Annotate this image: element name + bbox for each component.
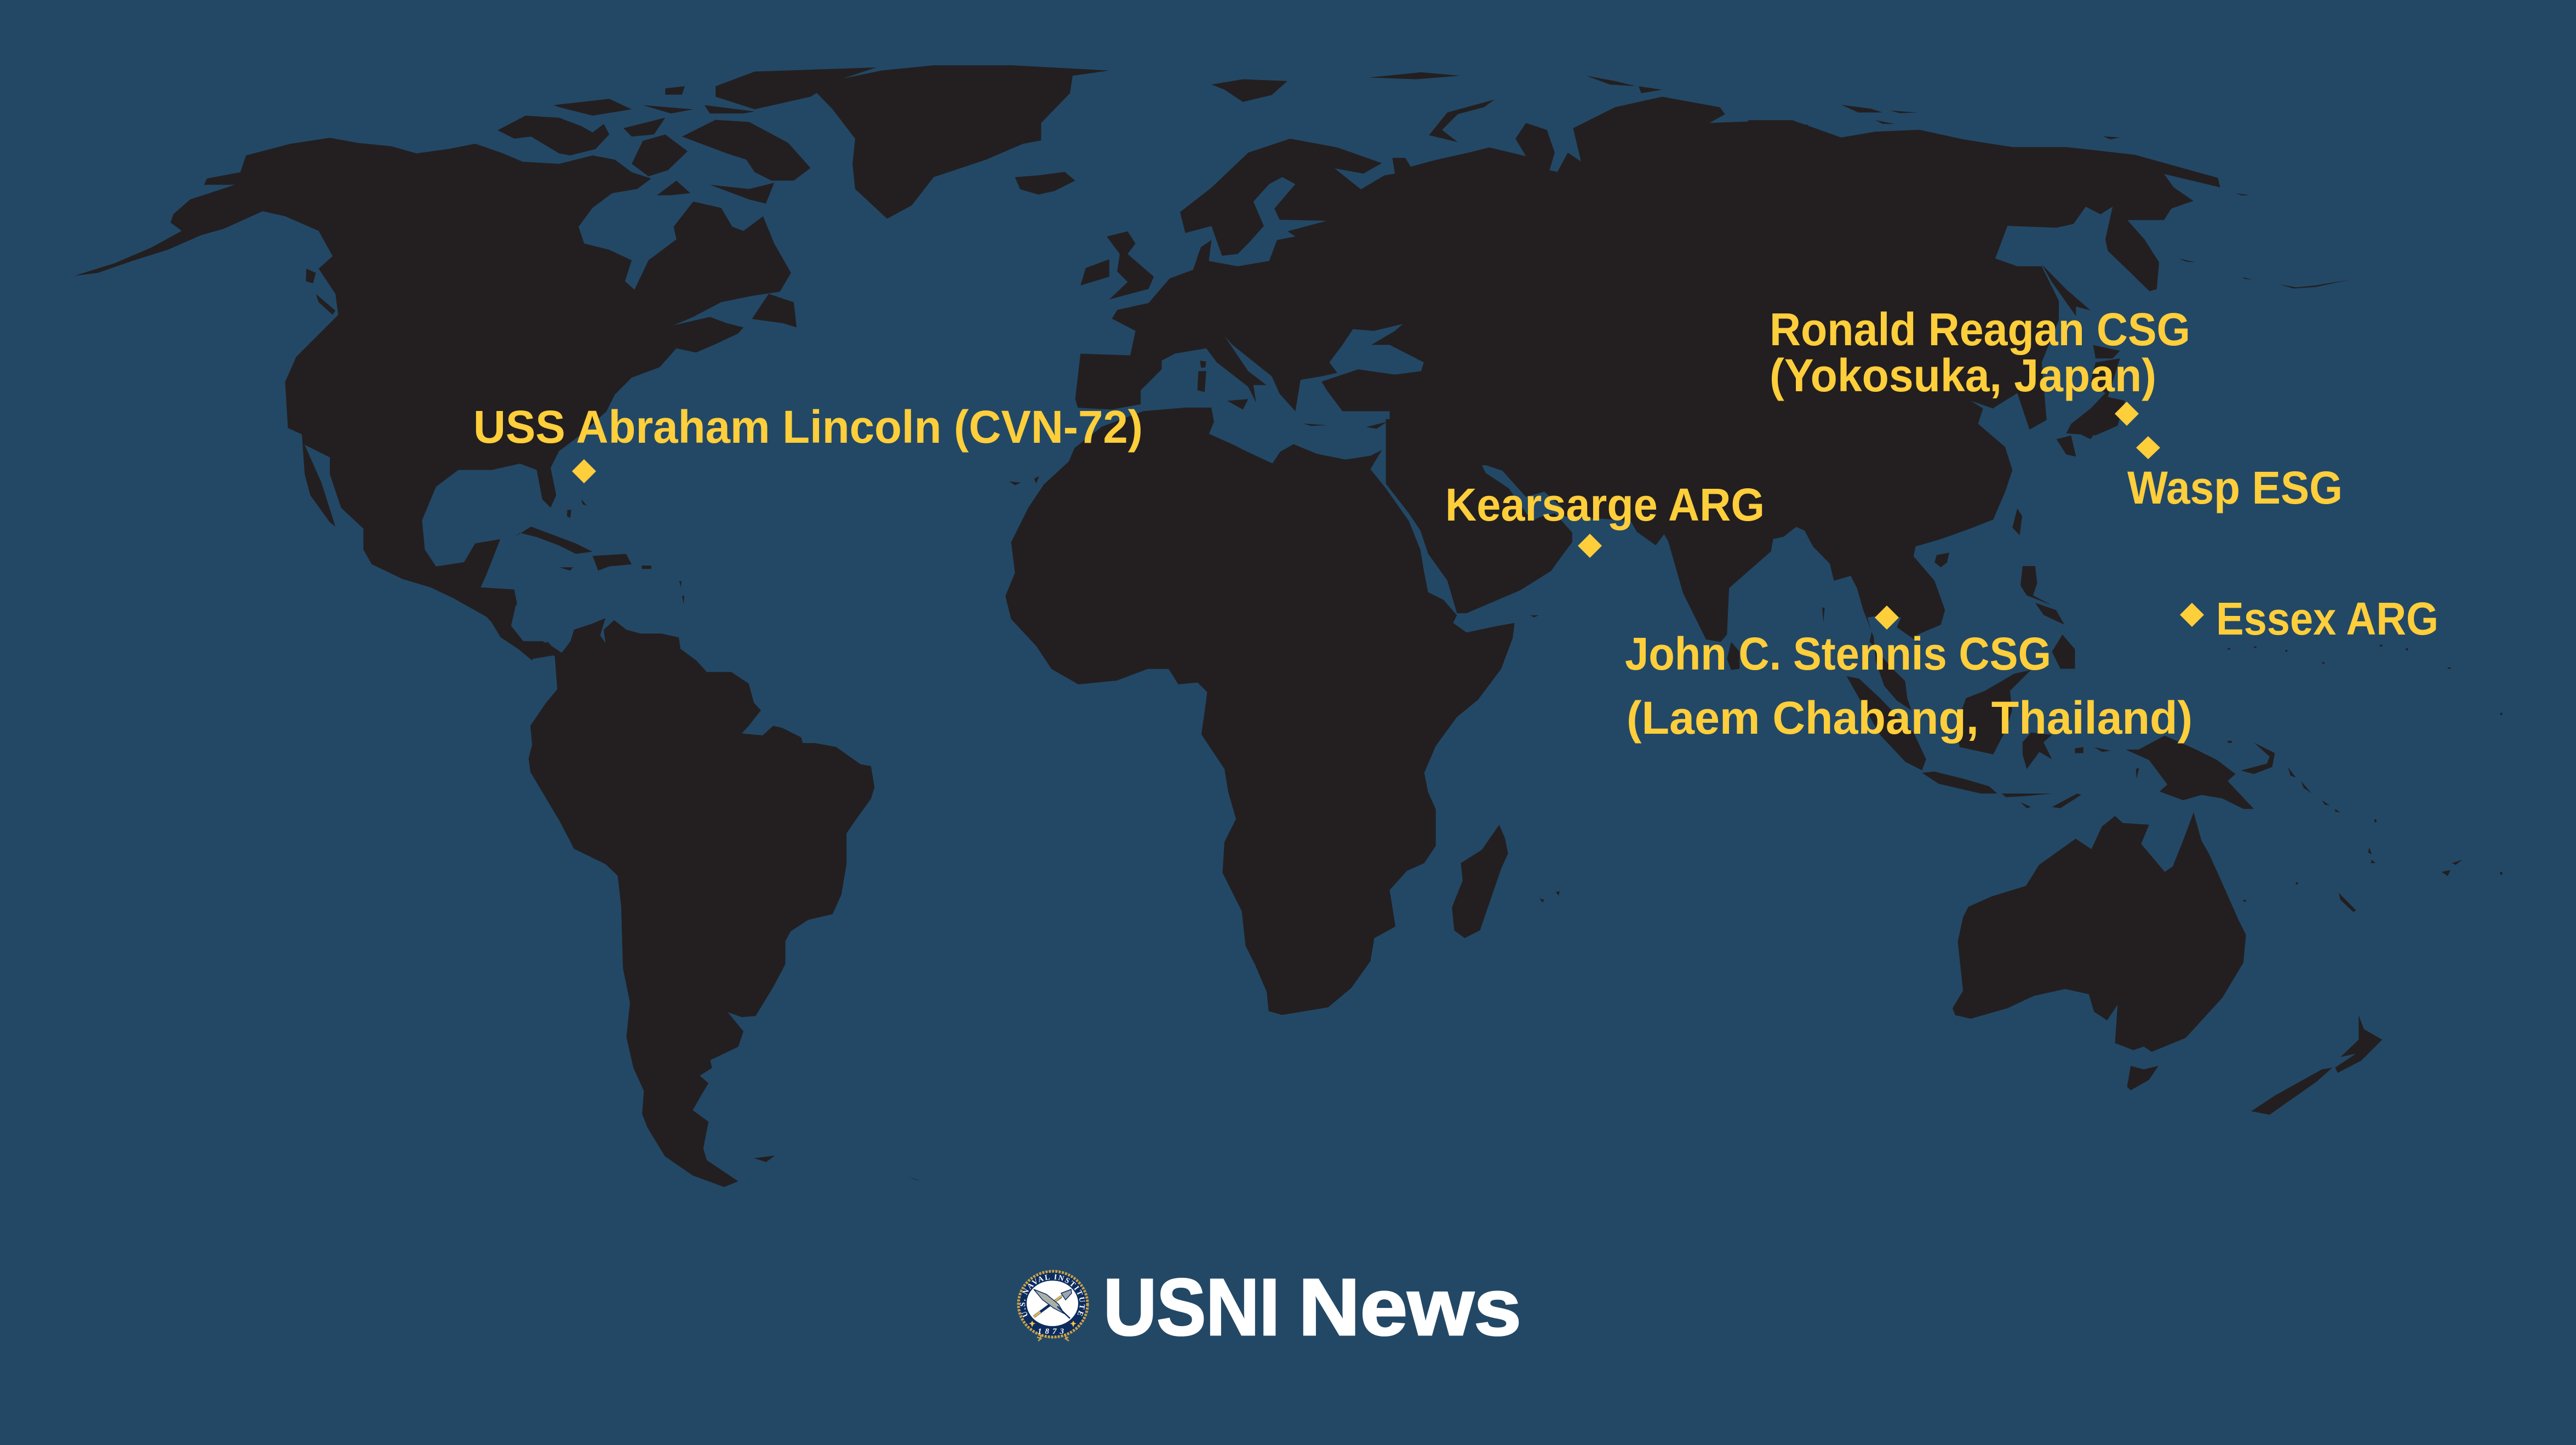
logo: U.S. Naval Institute seal: U.S. NAVAL INSTITUTE xyxy=(1020,1275,1085,1317)
marker: USS Abraham Lincoln xyxy=(572,459,596,483)
marker: John C. Stennis CSG xyxy=(1875,606,1899,630)
Sakhalin xyxy=(2042,264,2091,316)
North America xyxy=(75,67,877,659)
Kuril and Aleutian chains xyxy=(2179,259,2350,289)
logo: U.S. Naval Institute seal: 1873 xyxy=(1038,1327,1067,1336)
label: Wasp ESG: Wasp ESG xyxy=(2127,462,2343,513)
New Siberian Islands xyxy=(1841,105,2249,196)
New Caledonia, Vanuatu and Fiji xyxy=(2339,847,2463,912)
Arabian Peninsula xyxy=(1386,419,1572,613)
label: John C. Stennis CSG: John C. Stennis CSG xyxy=(1625,628,2051,679)
Borneo xyxy=(1955,670,2031,755)
label: Ronald Reagan CSG: Ronald Reagan CSG xyxy=(1770,304,2190,355)
label: Kearsarge ARG: Kearsarge ARG xyxy=(1445,479,1765,530)
label: John C. Stennis CSG: (Laem Chabang, Thailand) xyxy=(1627,692,2193,744)
Micronesia and Pacific specks xyxy=(2228,645,2502,901)
South America xyxy=(466,603,921,1187)
East Asia xyxy=(1748,105,2350,535)
logo wordmark: USNI News xyxy=(1103,1263,1521,1352)
New Britain and Solomon Islands xyxy=(2241,743,2340,813)
logo wordmark: USNI News: News xyxy=(1298,1263,1521,1352)
label: USS Abraham Lincoln: USS Abraham Lincoln (CVN-72) xyxy=(473,401,1143,453)
Philippines xyxy=(2020,566,2075,669)
logo: U.S. Naval Institute seal xyxy=(1017,1270,1089,1341)
Moluccas xyxy=(2075,747,2139,779)
label: Ronald Reagan CSG xyxy=(1770,304,2190,401)
Europe and northern Asia xyxy=(1015,72,1808,516)
Greenland xyxy=(816,65,1109,219)
Andaman Islands xyxy=(1822,608,1825,622)
Australia xyxy=(1953,813,2246,1052)
Sumatra xyxy=(1846,676,1926,770)
label: Ronald Reagan CSG: (Yokosuka, Japan) xyxy=(1770,350,2156,401)
Hainan xyxy=(1934,552,1949,567)
Australia and Oceania xyxy=(1953,645,2502,1115)
world map xyxy=(75,65,2502,1187)
marker: Wasp ESG xyxy=(2136,436,2160,459)
marker: Ronald Reagan CSG xyxy=(2115,402,2139,426)
Java and Lesser Sunda Islands xyxy=(1922,772,2077,797)
label: Essex ARG: Essex ARG xyxy=(2216,593,2438,644)
Africa xyxy=(1005,408,1560,1015)
Sulawesi xyxy=(2023,733,2052,769)
Tasmania xyxy=(2127,1066,2159,1090)
South and Southeast Asia mainland xyxy=(1561,464,2139,808)
logo wordmark: USNI News: USNI xyxy=(1103,1263,1280,1352)
Timor and Sumba xyxy=(2020,793,2081,808)
Japan xyxy=(2057,345,2125,456)
Taiwan xyxy=(2012,509,2022,535)
label: John C. Stennis CSG xyxy=(1625,628,2193,744)
marker: Kearsarge ARG xyxy=(1578,534,1602,558)
Sri Lanka xyxy=(1727,642,1739,670)
New Zealand xyxy=(2251,1015,2382,1115)
marker: Essex ARG xyxy=(2180,603,2204,627)
New Guinea xyxy=(2126,735,2254,809)
